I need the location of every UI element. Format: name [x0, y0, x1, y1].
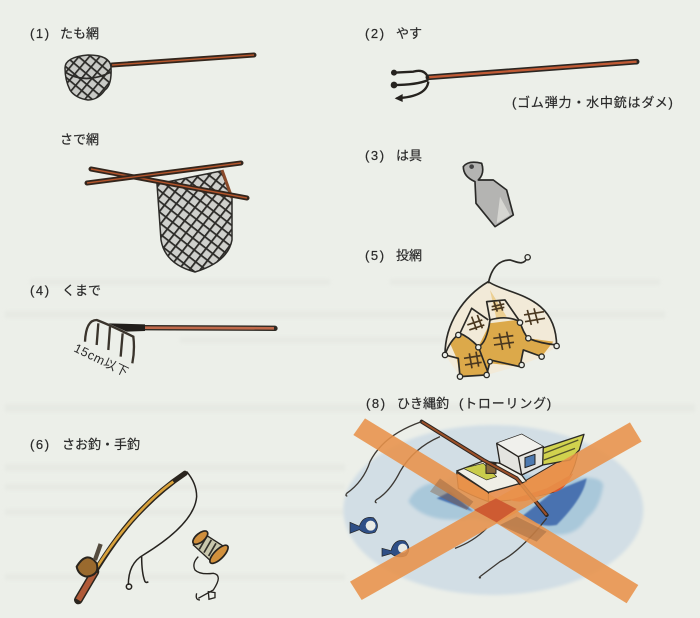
heading: (6) さお釣・手釣: (6)	[30, 437, 51, 452]
heading: (4) くまで: くまで	[62, 283, 101, 298]
trolling rod and lines	[346, 422, 547, 578]
icon: yasu fishing spear	[391, 62, 637, 102]
heading: (3) は具: は具	[396, 148, 422, 163]
heading: (5) 投網: (5)	[365, 248, 386, 263]
heading: (5) 投網: 投網	[396, 248, 422, 263]
heading: (3) は具: (3)	[365, 148, 386, 163]
label: 15cm以下: 15cm以下	[72, 341, 131, 380]
icon: fishing rod	[77, 472, 197, 600]
illustration: trolling boat on water	[343, 418, 643, 603]
boat	[457, 434, 584, 502]
heading: (1) たも網: (1)	[30, 26, 51, 41]
heading: (2) やす: やす	[396, 26, 422, 41]
heading: (6) さお釣・手釣: さお釣・手釣	[62, 437, 140, 452]
icon: sade net	[87, 163, 247, 272]
icon: shell tool	[463, 162, 513, 227]
note: ゴム弾力・水中銃はダメ: (ゴム弾力・水中銃はダメ)	[512, 95, 674, 110]
icon: tamo hand net	[65, 55, 254, 100]
icon: cast net	[442, 255, 559, 379]
heading: (2) やす: (2)	[365, 26, 386, 41]
heading: さで網: さで網	[60, 132, 99, 147]
prohibition cross mark	[350, 418, 642, 603]
heading: (8) ひき縄釣(トローリング): (トローリング)	[459, 396, 552, 411]
heading: (4) くまで: (4)	[30, 283, 51, 298]
icon: hand line spool	[191, 529, 231, 600]
heading: (1) たも網: たも網	[60, 26, 99, 41]
heading: (8) ひき縄釣(トローリング): (8)	[366, 396, 387, 411]
icon: kumade rake	[85, 320, 275, 363]
heading: (8) ひき縄釣(トローリング): ひき縄釣	[397, 396, 449, 411]
fish	[350, 517, 409, 557]
